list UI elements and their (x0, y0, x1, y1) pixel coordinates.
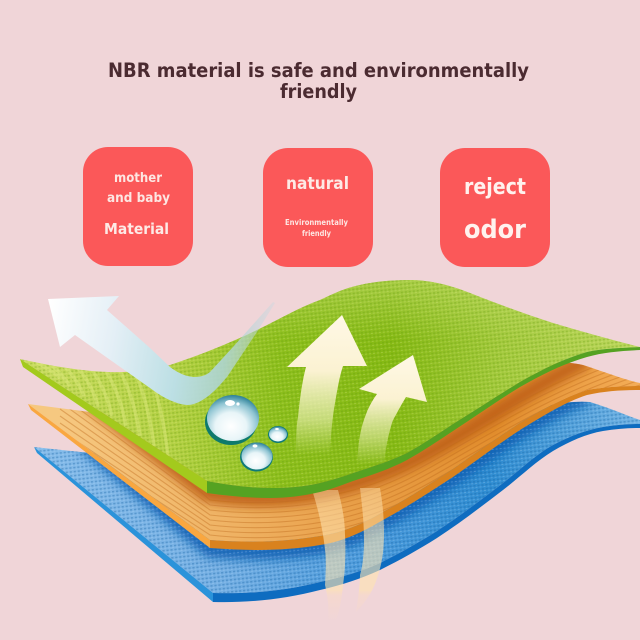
icon: medium water drop (240, 442, 273, 472)
green left-corner ribs (36, 362, 168, 456)
icon: large water drop (205, 395, 259, 445)
blue layer (34, 397, 640, 602)
arrow: small warm air arrow (357, 355, 427, 465)
green surface (20, 280, 640, 488)
arrow: large warm air arrow (287, 315, 367, 455)
panel: natural: Environmentally (285, 218, 349, 227)
title (108, 59, 529, 103)
stripes (60, 350, 640, 538)
panel: natural: natural (286, 174, 349, 194)
panel: mother and baby material: mother (114, 171, 163, 186)
green layer (20, 280, 640, 498)
panel: mother and baby material: and baby (107, 191, 170, 206)
panel: mother and baby material: Material (104, 220, 169, 238)
panel: mother and baby material (83, 147, 193, 266)
orange layer (28, 350, 640, 550)
icon: small water drop (268, 426, 288, 443)
green side edge (20, 359, 207, 493)
panel: natural (263, 148, 373, 267)
title: NBR material is safe and environmentally (108, 59, 529, 82)
panel: reject odor (440, 148, 550, 267)
panel: natural: friendly (302, 229, 332, 238)
arrow: heat stripes through lower layers (312, 488, 384, 622)
green front edge (207, 347, 640, 498)
title: friendly (280, 80, 357, 103)
panel: reject odor: reject (464, 174, 526, 200)
panel: reject odor: odor (464, 215, 526, 245)
arrow: moisture escaping (48, 296, 275, 405)
